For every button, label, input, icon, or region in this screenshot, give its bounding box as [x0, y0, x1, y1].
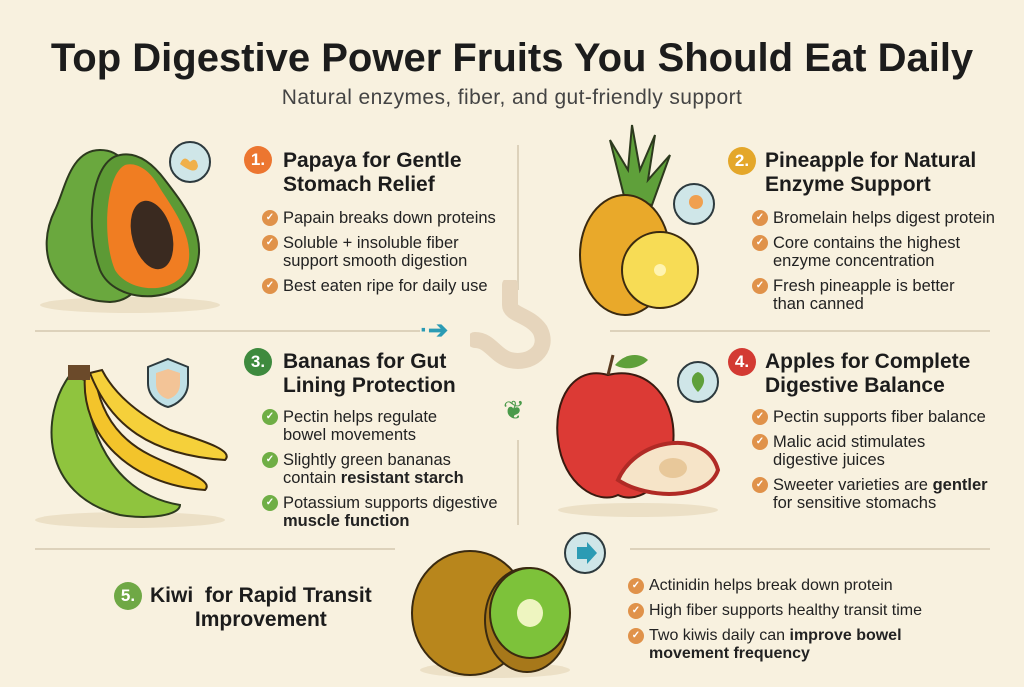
bullets 3: contain resistant starch — [283, 469, 464, 487]
icon: enzyme circle — [169, 141, 211, 183]
icon: enzyme circle 2 — [673, 183, 715, 225]
heading 1 — [283, 149, 462, 196]
icon: stomach center — [470, 280, 551, 369]
badge 1: 1. — [251, 150, 265, 169]
bullets 1: Soluble + insoluble fiber — [283, 234, 459, 252]
heading 2: Pineapple for Natural — [765, 149, 976, 172]
bullets 4: digestive juices — [773, 451, 885, 469]
badge 1 — [244, 146, 272, 174]
bullets 5: Actinidin helps break down protein — [649, 577, 893, 594]
arrow right: ·➔ — [420, 317, 448, 344]
badge 3: 3. — [251, 352, 265, 371]
bullets 5: High fiber supports healthy transit time — [649, 602, 922, 619]
bullets 3: muscle function — [283, 512, 410, 530]
bullets 1: Papain breaks down proteins — [283, 209, 496, 227]
badge 4: 4. — [735, 352, 749, 371]
heading 3: Bananas for Gut — [283, 350, 446, 373]
illustration: pineapple — [579, 124, 699, 316]
title: Top Digestive Power Fruits You Should Eat Daily — [51, 36, 973, 80]
heading 4: Digestive Balance — [765, 374, 945, 397]
bullets 4: Pectin supports fiber balance — [773, 408, 986, 426]
illustration: apple — [556, 354, 720, 517]
heading 4: Apples for Complete — [765, 350, 970, 373]
bullets 3: Pectin helps regulate — [283, 408, 437, 426]
bullets 2 — [752, 209, 995, 313]
badge 3 — [244, 348, 272, 376]
bullets 3: bowel movements — [283, 426, 416, 444]
badge 4 — [728, 348, 756, 376]
bullets 2: enzyme concentration — [773, 252, 934, 270]
heading 1: Stomach Relief — [283, 173, 435, 196]
icon: leaf center: ❦ — [503, 395, 525, 425]
illustration: papaya — [40, 149, 220, 313]
badge 5 — [114, 582, 142, 610]
illustration: kiwi — [411, 550, 571, 678]
bullets 1: Best eaten ripe for daily use — [283, 277, 488, 295]
bullets 3 — [262, 408, 498, 530]
badge 2 — [728, 147, 756, 175]
heading 5: Kiwi for Rapid Transit — [150, 584, 372, 607]
bullets 3: Slightly green bananas — [283, 451, 451, 469]
heading 1: Papaya for Gentle — [283, 149, 462, 172]
heading 3: Lining Protection — [283, 374, 456, 397]
bullets 4: Malic acid stimulates — [773, 433, 925, 451]
bullets 4: Sweeter varieties are gentler — [773, 476, 988, 494]
bullets 5 — [628, 577, 922, 662]
bullets 5: movement frequency — [649, 645, 810, 662]
bullets 2: Fresh pineapple is better — [773, 277, 955, 295]
badge 2: 2. — [735, 151, 749, 170]
bullets 1: support smooth digestion — [283, 252, 467, 270]
icon: fast arrow circle — [564, 532, 606, 574]
bullets 1 — [262, 209, 496, 295]
icon: leaf circle — [677, 361, 719, 403]
bullets 2: Bromelain helps digest protein — [773, 209, 995, 227]
subtitle: Natural enzymes, fiber, and gut-friendly support — [282, 86, 742, 109]
bullets 4 — [752, 408, 988, 512]
icon: shield — [147, 358, 189, 408]
heading 2 — [765, 149, 976, 196]
badge 5: 5. — [121, 586, 135, 605]
bullets 3: Potassium supports digestive — [283, 494, 498, 512]
bullets 2: than canned — [773, 295, 864, 313]
bullets 4: for sensitive stomachs — [773, 494, 936, 512]
illustration: bananas — [35, 365, 228, 528]
heading 5 — [150, 584, 372, 631]
heading 5: Improvement — [195, 608, 327, 631]
heading 2: Enzyme Support — [765, 173, 931, 196]
heading 3 — [283, 350, 456, 397]
heading 4 — [765, 350, 970, 397]
bullets 5: Two kiwis daily can improve bowel — [649, 627, 902, 644]
bullets 2: Core contains the highest — [773, 234, 960, 252]
